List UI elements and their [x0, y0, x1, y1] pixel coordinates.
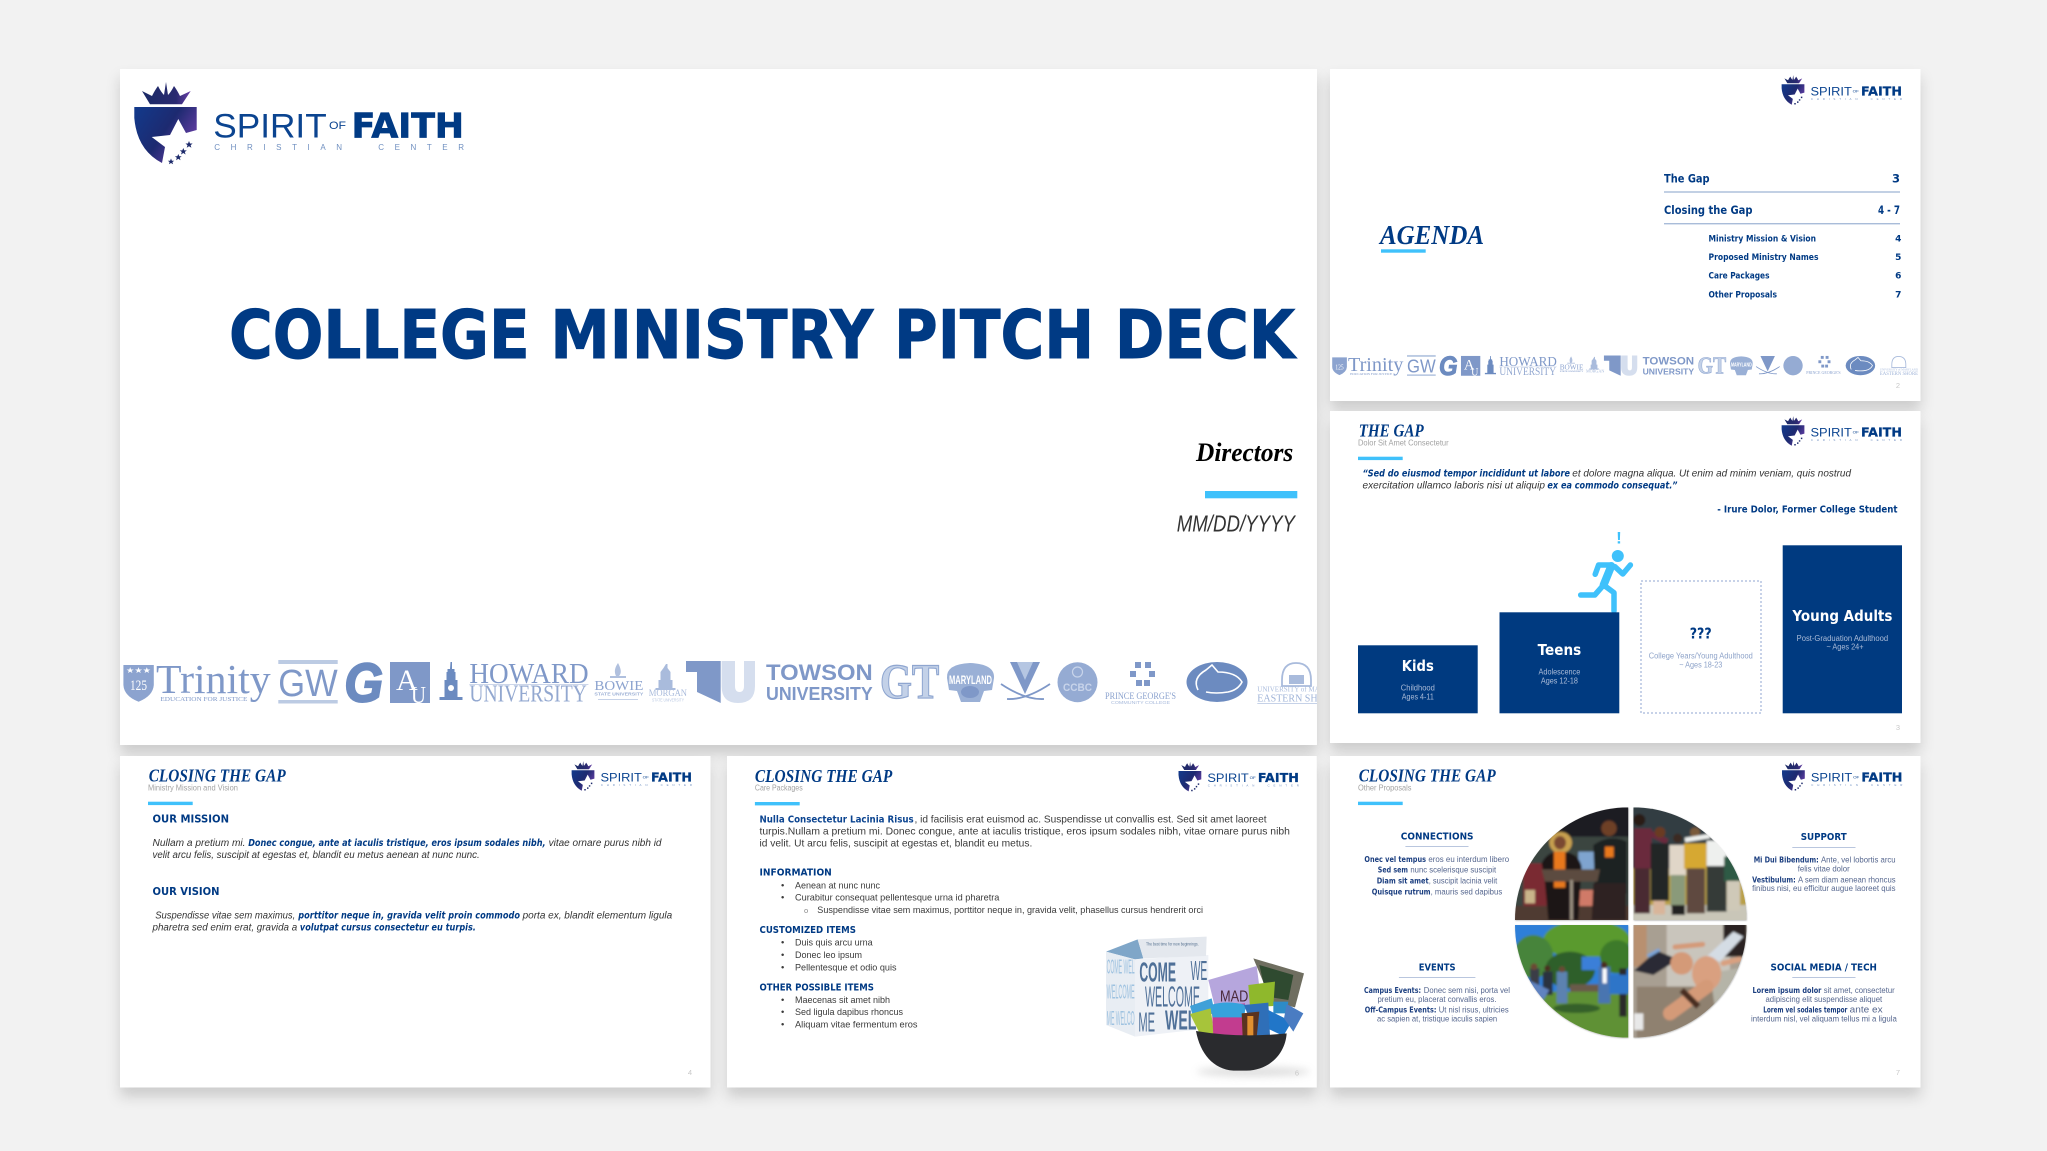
block: events: Ut nisl risus, ultricies [1439, 1005, 1509, 1015]
image: welcome box and snack bowl: The best time for new beginnings. [1146, 941, 1199, 946]
bar: young adults: ~ Ages 24+ [1826, 643, 1864, 652]
image: welcome box and snack bowl: MAD [1220, 989, 1248, 1006]
logo: Spirit of Faith: FAITH [1861, 83, 1902, 98]
logo: Spirit of Faith: FAITH [352, 106, 464, 146]
logo: Spirit of Faith: SPIRIT [1810, 84, 1852, 98]
vision paragraph [152, 910, 673, 933]
quote attribution: - Irure Dolor, Former College Student [1717, 504, 1898, 515]
bar: young adults: Young Adults [1792, 607, 1892, 625]
university logo strip: BOWIE [1560, 364, 1583, 371]
image: welcome box and snack bowl: WELC [1165, 1004, 1207, 1035]
block: connections: Sed sem [1378, 865, 1408, 875]
heading: closing the gap: CLOSING THE GAP [149, 766, 286, 786]
quote: ex ea commodo consequat.” [1547, 481, 1678, 492]
list: other possible items [760, 982, 918, 1029]
intro paragraph: id velit. Ut arcu felis, suscipit at egestas et, blandit eu metus. [760, 838, 1032, 849]
agenda list: Other Proposals [1708, 290, 1777, 300]
logo: Spirit of Faith: CHRISTIAN CENTER [1208, 784, 1299, 788]
list: information: o [804, 906, 808, 915]
block: connections: , mauris sed dapibus [1431, 886, 1502, 896]
logo: Spirit of Faith [572, 761, 692, 791]
university logo strip: GW [1407, 355, 1436, 376]
subheading: Dolor Sit Amet Consectetur [1358, 438, 1449, 447]
block: events: pretium eu, placerat convallis eros. [1378, 994, 1496, 1004]
photo: group from behind [1632, 805, 1748, 922]
bar: kids: Childhood [1401, 684, 1435, 693]
university logo strip: EDUCATION FOR JUSTICE [1350, 372, 1392, 376]
university logo strip: 125 [130, 678, 147, 694]
block: social media and tech [1751, 962, 1897, 1024]
agenda list: Ministry Mission & Vision [1708, 234, 1816, 244]
subheading: Other Proposals [1358, 784, 1412, 793]
logo: Spirit of Faith: SPIRIT [600, 770, 642, 784]
agenda list [1664, 171, 1901, 300]
block: connections: Quisque rutrum [1372, 886, 1431, 896]
list: customized items: • [781, 949, 784, 960]
quote [1362, 469, 1851, 492]
logo: Spirit of Faith: FAITH [1861, 769, 1902, 784]
logo: Spirit of Faith: CHRISTIAN CENTER [1811, 97, 1902, 101]
university logo strip: BOWIE [594, 679, 643, 694]
list: other possible items: OTHER POSSIBLE ITEMS [760, 982, 874, 993]
list: information: • [781, 880, 784, 891]
university logo strip: EDUCATION FOR JUSTICE [160, 696, 247, 703]
logo: Spirit of Faith: FAITH [651, 769, 692, 784]
block: social media and tech: Lorem ipsum dolor [1752, 985, 1822, 995]
list: other possible items: Sed ligula dapibus rhoncus [795, 1006, 903, 1017]
bar: unknown college years: College Years/Young Adulthood [1649, 652, 1753, 661]
bar: unknown college years: ~ Ages 18-23 [1679, 660, 1723, 669]
logo: Spirit of Faith: CHRISTIAN CENTER [1811, 783, 1902, 787]
list: customized items: CUSTOMIZED ITEMS [760, 925, 856, 936]
block: social media and tech: ante ex [1850, 1005, 1883, 1016]
logo: Spirit of Faith: OF [1853, 774, 1860, 779]
logo: Spirit of Faith: SPIRIT [1207, 771, 1249, 785]
accent bar [755, 802, 800, 805]
block: support: Mi Dui Bibendum: [1754, 854, 1819, 864]
bar: kids [1358, 645, 1478, 713]
page number: 3 [1896, 723, 1900, 732]
page number: 6 [1295, 1069, 1299, 1078]
block: events: Donec sem nisi, porta vel [1424, 985, 1510, 995]
university logo strip: EASTERN SHORE [1880, 372, 1918, 377]
photo: speakers at podium [1510, 800, 1630, 922]
mission paragraph: Donec congue, ante at iaculis tristique, eros ipsum sodales nibh, [248, 838, 546, 849]
page number: 7 [1896, 1068, 1900, 1077]
vision paragraph: pharetra sed enim erat, gravida a [152, 922, 298, 933]
image: welcome box and snack bowl: WELCOME [1107, 980, 1135, 1003]
intro paragraph: , id facilisis erat euismod ac. Suspendisse ut convallis est. Sed sit amet laoreet [914, 815, 1267, 826]
page number: 4 [688, 1068, 692, 1077]
block: social media and tech: interdum nisl, vel aliquam tellus mi a ligula [1751, 1014, 1897, 1024]
agenda list: 7 [1895, 290, 1901, 300]
mission paragraph: velit arcu felis, suscipit at egestas et, blandit eu metus aenean at nunc nunc. [152, 850, 480, 861]
list: information: Suspendisse vitae sem maximus, porttitor neque in, gravida velit, phasellus cursus hendrerit orci [817, 904, 1203, 915]
logo: Spirit of Faith: OF [329, 120, 346, 132]
agenda list: 4 - 7 [1878, 203, 1900, 217]
heading: the gap: THE GAP [1359, 421, 1424, 441]
block: social media and tech: sit amet, consectetur [1824, 985, 1895, 995]
list: information [760, 868, 1203, 915]
list: other possible items: • [781, 994, 784, 1005]
presenter label: Directors [1195, 438, 1293, 467]
university logo strip: HOWARD [469, 658, 589, 690]
logo: Spirit of Faith: OF [643, 774, 650, 779]
university logo strip: TOWSON [766, 660, 873, 685]
logo: Spirit of Faith: FAITH [1861, 424, 1902, 439]
list: customized items: Duis quis arcu urna [795, 937, 873, 948]
image: welcome box and snack bowl: WE [1191, 955, 1207, 986]
agenda list: 5 [1895, 253, 1901, 263]
logo: Spirit of Faith: SPIRIT [1811, 770, 1853, 784]
list: customized items: • [781, 937, 784, 948]
university logo strip: MARYLAND [949, 673, 992, 687]
university logo strip: A [1464, 357, 1475, 373]
block: events: ac sapien at, tristique iaculis sapien [1377, 1014, 1497, 1024]
image: welcome box and snack bowl: WELCOME [1145, 982, 1200, 1014]
logo: Spirit of Faith: FAITH [1258, 770, 1299, 785]
university logo strip: STATE UNIVERSITY [652, 698, 684, 702]
intro paragraph [760, 815, 1290, 849]
university logo strip: STATE UNIVERSITY [1560, 370, 1584, 373]
university logo strip: GW [278, 663, 338, 705]
accent bar [1358, 802, 1403, 805]
heading: our mission: OUR MISSION [152, 813, 229, 826]
vision paragraph: porttitor neque in, gravida velit proin commodo [297, 910, 520, 921]
logo: Spirit of Faith [1179, 762, 1299, 791]
accent bar [1205, 491, 1297, 498]
bar: kids: Ages 4-11 [1402, 693, 1434, 702]
agenda list: 6 [1895, 272, 1901, 282]
icon: running figure [1581, 550, 1630, 611]
agenda list: 3 [1892, 171, 1900, 185]
quote: “Sed do eiusmod tempor incididunt ut labore [1362, 469, 1570, 480]
quote: exercitation ullamco laboris nisi ut aliquip [1362, 481, 1545, 492]
university logo strip: COMMUNITY COLLEGE [1111, 700, 1170, 705]
block: support: SUPPORT [1801, 832, 1847, 843]
quote: et dolore magna aliqua. Ut enim ad minim veniam, quis nostrud [1572, 469, 1851, 480]
vision paragraph: porta ex, blandit elementum ligula [522, 910, 673, 921]
list: customized items: Pellentesque et odio quis [795, 961, 897, 972]
mission paragraph [152, 838, 662, 861]
list: customized items: Donec leo ipsum [795, 949, 862, 960]
subheading: Care Packages [755, 784, 803, 793]
heading: closing the gap: CLOSING THE GAP [1359, 766, 1496, 786]
university logo strip: GT [1698, 352, 1726, 379]
mission paragraph: vitae ornare purus nibh id [549, 838, 662, 849]
bar: teens: Ages 12-18 [1541, 676, 1578, 685]
university logo strip: HOWARD [1499, 355, 1557, 370]
date: MM/DD/YYYY [1177, 511, 1296, 537]
logo: Spirit of Faith [1782, 416, 1902, 446]
university logo strip: UNIVERSITY [766, 684, 873, 704]
logo: Spirit of Faith: OF [1250, 775, 1256, 780]
bar: young adults [1783, 545, 1902, 713]
block: events: Campus Events: [1364, 985, 1421, 995]
logo: Spirit of Faith: CHRISTIAN CENTER [1811, 438, 1902, 442]
block: social media and tech: adipiscing elit suspendisse aliquet [1766, 994, 1883, 1004]
accent bar [1358, 457, 1403, 460]
intro paragraph: turpis.Nullam a pretium mi. Donec congue, ante at iaculis tristique, eros ipsum sodales nibh, vitae ornare purus nibh [760, 827, 1290, 838]
block: connections: Onec vel tempus [1364, 854, 1426, 864]
bar: teens: Teens [1538, 641, 1581, 659]
block: events: Off-Campus Events: [1365, 1005, 1436, 1015]
bar: unknown college years [1641, 581, 1761, 713]
bar: young adults: Post-Graduation Adulthood [1797, 634, 1888, 643]
accent bar [1381, 249, 1426, 253]
title: COLLEGE MINISTRY PITCH DECK [229, 296, 1297, 374]
university logo strip: 125 [1335, 363, 1344, 371]
university logo strip: Trinity [156, 656, 271, 702]
heading: closing the gap: CLOSING THE GAP [755, 766, 893, 786]
block: events: EVENTS [1419, 962, 1456, 973]
list: other possible items: • [781, 1006, 784, 1017]
logo: Spirit of Faith [1782, 761, 1902, 791]
university logo strip: EASTERN SHORE [1257, 694, 1338, 705]
bar: kids: Kids [1402, 657, 1434, 675]
university logo strip: UNIVERSITY [1499, 365, 1557, 378]
logo: Spirit of Faith [134, 82, 464, 164]
university logo strip: PRINCE GEORGE'S [1105, 692, 1176, 702]
block: connections: nunc scelerisque suscipit [1410, 865, 1497, 875]
university logo strip: MORGAN [1586, 368, 1605, 373]
block: support: finibus nisi, eu efficitur augue laoreet quis [1752, 883, 1896, 893]
list: other possible items: • [781, 1018, 784, 1029]
university logo strip: PRINCE GEORGE'S [1806, 370, 1841, 375]
heading: our vision: OUR VISION [152, 885, 220, 898]
list: other possible items: Aliquam vitae fermentum eros [795, 1018, 918, 1029]
mission paragraph: Nullam a pretium mi. [152, 838, 246, 849]
image: welcome box and snack bowl: COME WEL [1107, 955, 1135, 978]
university logo strip: UNIVERSITY of MARYLAND [1257, 686, 1348, 694]
panel: agenda slide [1330, 69, 1920, 401]
intro paragraph: Nulla Consectetur Lacinia Risus [760, 815, 914, 826]
university logo strip: UNIVERSITY [1643, 366, 1694, 376]
list: customized items [760, 925, 897, 972]
agenda list: The Gap [1664, 171, 1710, 185]
logo: Spirit of Faith: CHRISTIAN CENTER [214, 143, 464, 152]
vision paragraph: volutpat cursus consectetur eu turpis. [300, 922, 476, 933]
agenda list: Closing the Gap [1664, 203, 1752, 217]
university logo strip [1332, 351, 1919, 381]
university logo strip: U [1471, 366, 1479, 379]
panel: the gap slide [1330, 411, 1920, 743]
panel: care packages slide [727, 756, 1317, 1088]
block: support [1752, 832, 1896, 893]
university logo strip: STATE UNIVERSITY [594, 692, 643, 696]
list: information: INFORMATION [760, 868, 832, 879]
university logo strip: GT [880, 653, 939, 709]
logo: Spirit of Faith: OF [1853, 88, 1860, 93]
agenda list: Care Packages [1708, 272, 1770, 282]
list: information: Aenean at nunc nunc [795, 880, 880, 891]
list: information: • [781, 892, 784, 903]
bar: teens [1500, 612, 1619, 713]
image: welcome box and snack bowl [1106, 937, 1310, 1076]
block: social media and tech: SOCIAL MEDIA / TECH [1770, 962, 1877, 973]
icon: exclamation mark: ! [1616, 528, 1622, 548]
block: connections [1364, 831, 1509, 896]
panel: mission and vision slide [120, 756, 710, 1088]
agenda list: 4 [1895, 234, 1901, 244]
photo: hands holding phones [1632, 923, 1748, 1040]
logo: Spirit of Faith: OF [1853, 429, 1860, 434]
university logo strip: MORGAN [649, 688, 687, 698]
vision paragraph: Suspendisse vitae sem maximus, [155, 910, 295, 921]
university logo strip: Trinity [1348, 354, 1403, 376]
block: connections: Diam sit amet [1377, 876, 1429, 886]
university logo strip: G [1439, 351, 1458, 381]
bar: teens: Adolescence [1539, 667, 1581, 676]
university logo strip: UNIVERSITY of MARYLAND [1880, 367, 1919, 371]
subheading: Ministry Mission and Vision [148, 784, 238, 793]
university logo strip: MARYLAND [1731, 363, 1752, 369]
block: support: Ante, vel lobortis arcu [1821, 854, 1896, 864]
university logo strip: UNIVERSITY [469, 682, 587, 708]
block: social media and tech: Lorem vel sodales tempor [1763, 1005, 1848, 1015]
list: other possible items: Maecenas sit amet nibh [795, 994, 890, 1005]
photo circle [1510, 800, 1748, 1040]
university logo strip: A [396, 664, 418, 697]
block: connections: CONNECTIONS [1401, 831, 1474, 842]
panel: title slide [120, 69, 1348, 745]
university logo strip [123, 660, 1317, 704]
page number: 2 [1896, 381, 1900, 390]
image: welcome box and snack bowl: ME WELCO [1107, 1007, 1135, 1030]
list: information: Curabitur consequat pellentesque urna id pharetra [795, 892, 1000, 903]
list: customized items: • [781, 961, 784, 972]
block: support: A sem diam aenean rhoncus [1798, 874, 1896, 884]
block: connections: eros eu interdum libero [1428, 854, 1509, 864]
university logo strip: U [411, 683, 426, 709]
bar: unknown college years: ??? [1690, 624, 1712, 642]
panel: other proposals slide [1330, 756, 1920, 1088]
image: welcome box and snack bowl: ME [1138, 1007, 1155, 1038]
block: events [1364, 962, 1510, 1024]
block: connections: , suscipit lacinia velit [1429, 876, 1498, 886]
university logo strip: CCBC [1063, 682, 1092, 694]
image: welcome box and snack bowl: COME [1139, 957, 1176, 988]
heading: agenda: AGENDA [1378, 220, 1484, 250]
logo: Spirit of Faith: CHRISTIAN CENTER [601, 783, 692, 787]
photo: outdoor campus event [1513, 920, 1633, 1040]
agenda list: Proposed Ministry Names [1708, 253, 1818, 263]
block: support: Vestibulum: [1752, 874, 1796, 884]
logo: Spirit of Faith: SPIRIT [1810, 425, 1852, 439]
logo: Spirit of Faith: SPIRIT [213, 107, 327, 145]
university logo strip: ★★★ [126, 666, 151, 675]
accent bar [148, 802, 193, 805]
university logo strip: G [344, 652, 383, 714]
block: support: felis vitae dolor [1798, 863, 1850, 873]
logo: Spirit of Faith [1782, 75, 1902, 105]
university logo strip: TOWSON [1643, 356, 1694, 368]
